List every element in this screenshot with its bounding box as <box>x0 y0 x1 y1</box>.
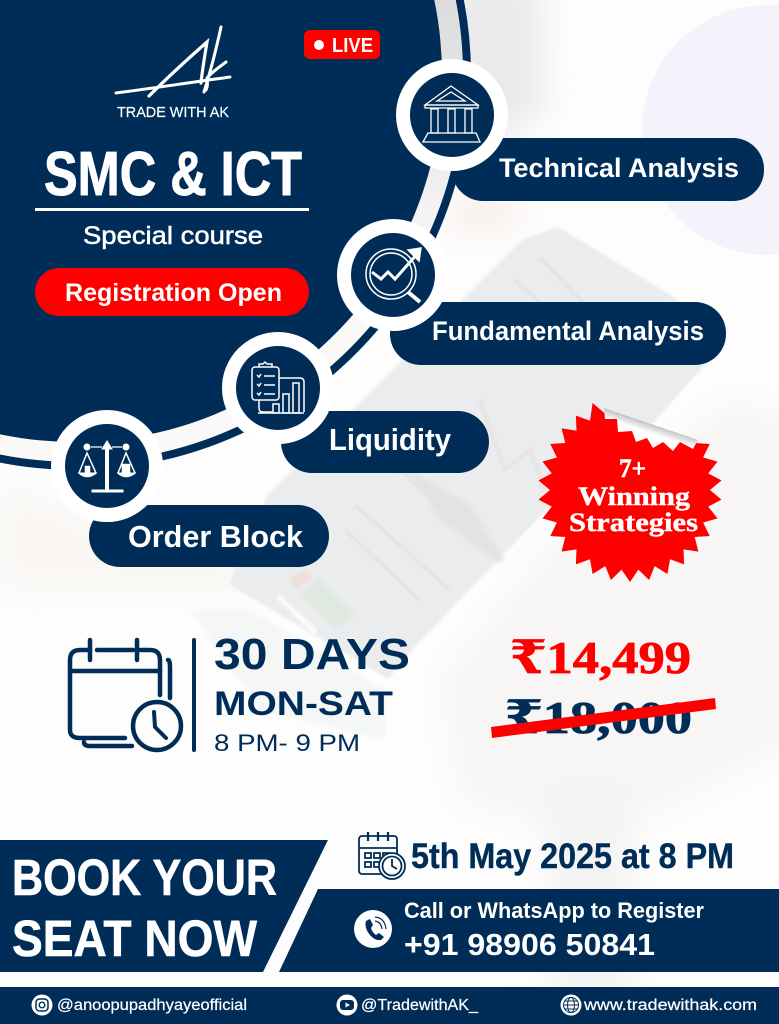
title: SMC & ICT <box>44 140 302 209</box>
footer bar: @anoopupadhyayeofficial <box>57 997 247 1014</box>
price: original struck through: ₹18,000 <box>505 692 692 743</box>
event date: 5th May 2025 at 8 PM <box>411 837 734 876</box>
icon: calendar with clock <box>70 640 181 750</box>
pill: Fundamental Analysis <box>390 302 726 365</box>
pill: Technical Analysis: Technical Analysis <box>499 153 739 183</box>
course schedule: MON-SAT <box>214 685 393 723</box>
badge: 7+ winning strategies: Winning <box>578 482 690 511</box>
footer bar <box>0 987 779 1024</box>
panel: book your seat <box>0 840 328 972</box>
logo: Trade With AK: TRADE WITH AK <box>117 104 229 121</box>
pill: Liquidity <box>281 411 489 473</box>
footer bar: www.tradewithak.com <box>583 997 757 1014</box>
title divider <box>35 208 309 211</box>
pill: Fundamental Analysis: Fundamental Analysis <box>432 316 704 346</box>
panel: book your seat: BOOK YOUR <box>12 849 277 906</box>
subtitle: Special course <box>83 222 263 250</box>
icon: clipboard and bar chart <box>229 339 327 437</box>
live badge <box>304 30 380 59</box>
pill: Technical Analysis <box>452 138 764 201</box>
icon: balance scale <box>58 417 156 515</box>
panel: contact: Call or WhatsApp to Register <box>404 898 704 923</box>
pill: Liquidity: Liquidity <box>329 422 452 457</box>
pill: Order Block: Order Block <box>128 519 304 554</box>
icon: date calendar <box>359 832 405 879</box>
panel: contact <box>279 889 779 972</box>
panel: book your seat: SEAT NOW <box>12 910 258 967</box>
badge: 7+ winning strategies: 7+ <box>619 454 646 483</box>
price: discounted: ₹14,499 <box>510 632 691 683</box>
icon: instagram <box>32 994 52 1016</box>
logo: Trade With AK <box>116 27 230 121</box>
navy arc background <box>0 0 467 466</box>
pill: Order Block <box>89 505 329 567</box>
panel: contact: +91 98906 50841 <box>404 927 655 962</box>
live badge: LIVE <box>332 35 373 57</box>
badge: 7+ winning strategies: Strategies <box>569 508 698 537</box>
course schedule: 30 DAYS <box>214 630 410 679</box>
duration divider <box>192 638 196 752</box>
icon: bank <box>403 66 501 164</box>
lavender circle <box>642 5 779 255</box>
icon: globe <box>560 994 582 1016</box>
badge: 7+ winning strategies <box>538 398 722 582</box>
icon: chart under magnifier <box>344 226 442 324</box>
course schedule: 8 PM- 9 PM <box>214 730 360 757</box>
footer bar: @TradewithAK_ <box>361 997 478 1014</box>
registration pill <box>35 268 309 316</box>
registration pill: Registration Open <box>65 279 282 307</box>
course schedule <box>214 630 410 757</box>
icon: youtube <box>336 994 358 1016</box>
